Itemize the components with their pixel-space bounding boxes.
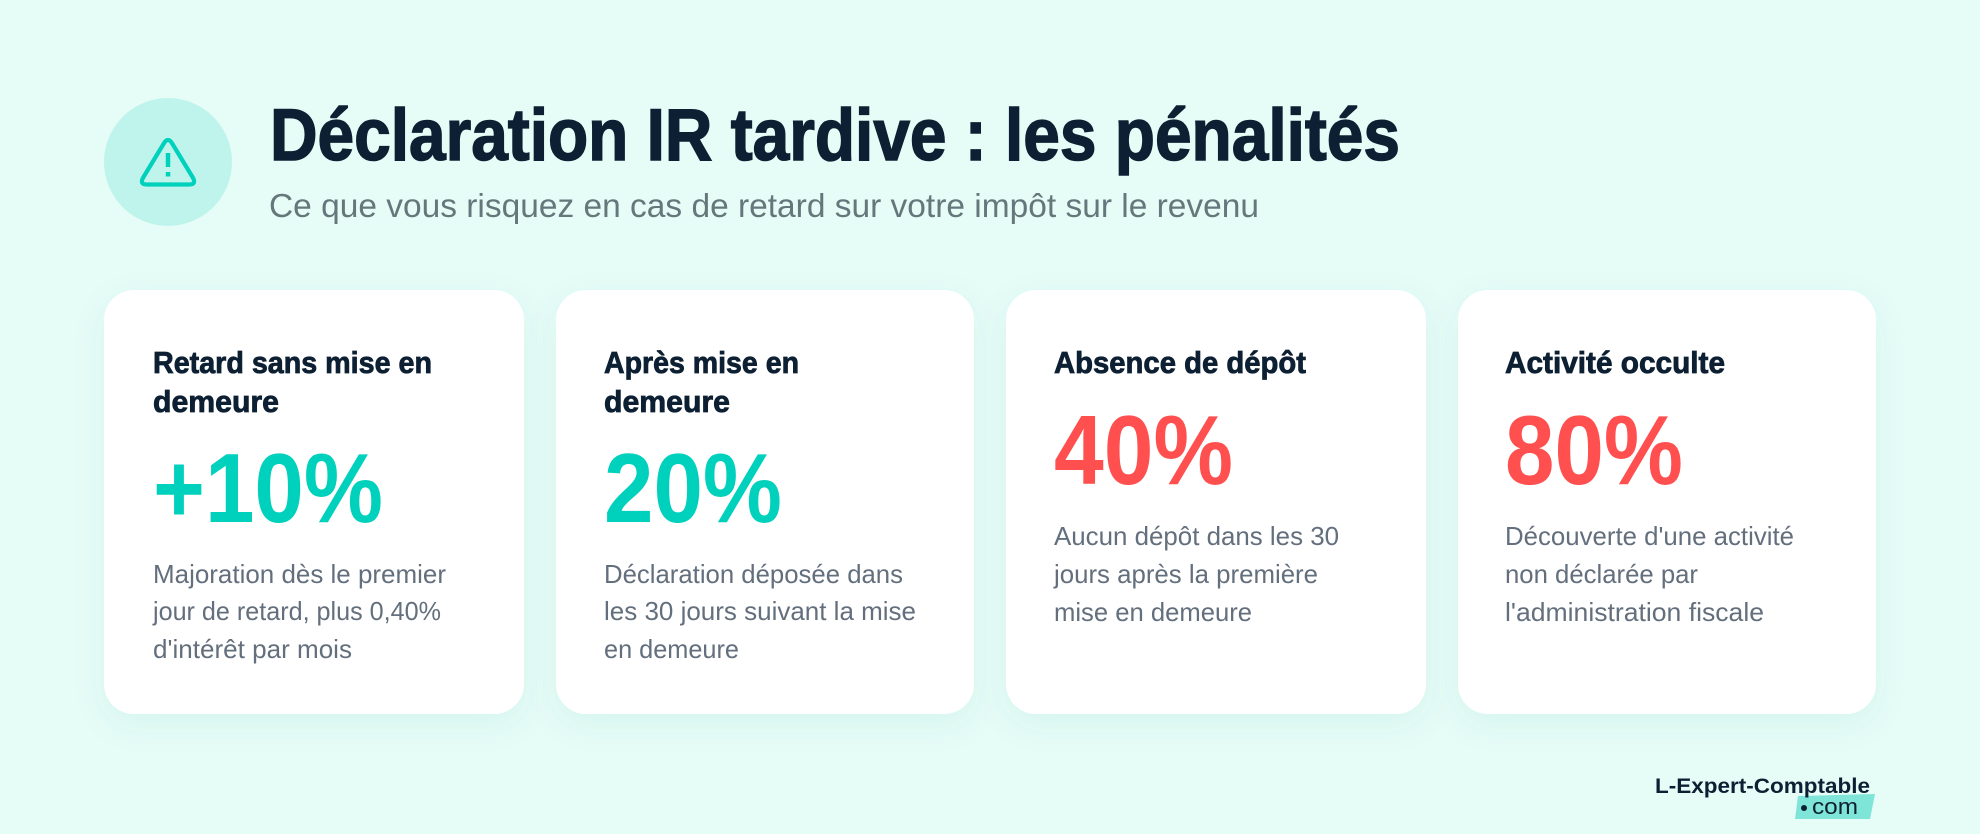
description: mise en demeure bbox=[1054, 597, 1252, 627]
header bbox=[104, 95, 1400, 226]
title: Déclaration IR tardive : les pénalités bbox=[270, 95, 1400, 176]
description: Aucun dépôt dans les 30 bbox=[1054, 521, 1339, 551]
description: jours après la première bbox=[1053, 559, 1318, 589]
panel: absence de dépôt bbox=[1006, 290, 1426, 714]
panel: retard sans mise en demeure bbox=[104, 290, 524, 714]
description: Majoration dès le premier bbox=[153, 559, 446, 589]
card heading: Absence de dépôt bbox=[1054, 345, 1306, 380]
card heading: demeure bbox=[604, 384, 730, 419]
figure: 40%: 40% bbox=[1054, 395, 1233, 505]
card heading: demeure bbox=[153, 384, 279, 419]
description: en demeure bbox=[604, 634, 739, 664]
subtitle: Ce que vous risquez en cas de retard sur votre impôt sur le revenu bbox=[269, 188, 1259, 225]
figure: 80%: 80% bbox=[1505, 395, 1683, 505]
description: Découverte d'une activité bbox=[1505, 521, 1794, 551]
description: les 30 jours suivant la mise bbox=[604, 596, 916, 626]
logo: L-Expert-Comptable bbox=[1655, 775, 1870, 798]
panel: après mise en demeure bbox=[556, 290, 974, 714]
card heading: Après mise en bbox=[604, 345, 799, 380]
description: Déclaration déposée dans bbox=[604, 559, 903, 589]
description: l'administration fiscale bbox=[1505, 597, 1764, 627]
figure: 20%: 20% bbox=[604, 433, 782, 543]
card heading: Activité occulte bbox=[1505, 345, 1725, 380]
figure: +10%: +10% bbox=[153, 433, 383, 543]
logo: com bbox=[1812, 794, 1858, 819]
description: non déclarée par bbox=[1505, 559, 1698, 589]
description: d'intérêt par mois bbox=[153, 634, 352, 664]
logo bbox=[1655, 775, 1875, 819]
panel: activité occulte bbox=[1458, 290, 1876, 714]
icon: warning triangle bbox=[104, 98, 232, 226]
description: jour de retard, plus 0,40% bbox=[152, 596, 441, 626]
card heading: Retard sans mise en bbox=[153, 345, 432, 380]
